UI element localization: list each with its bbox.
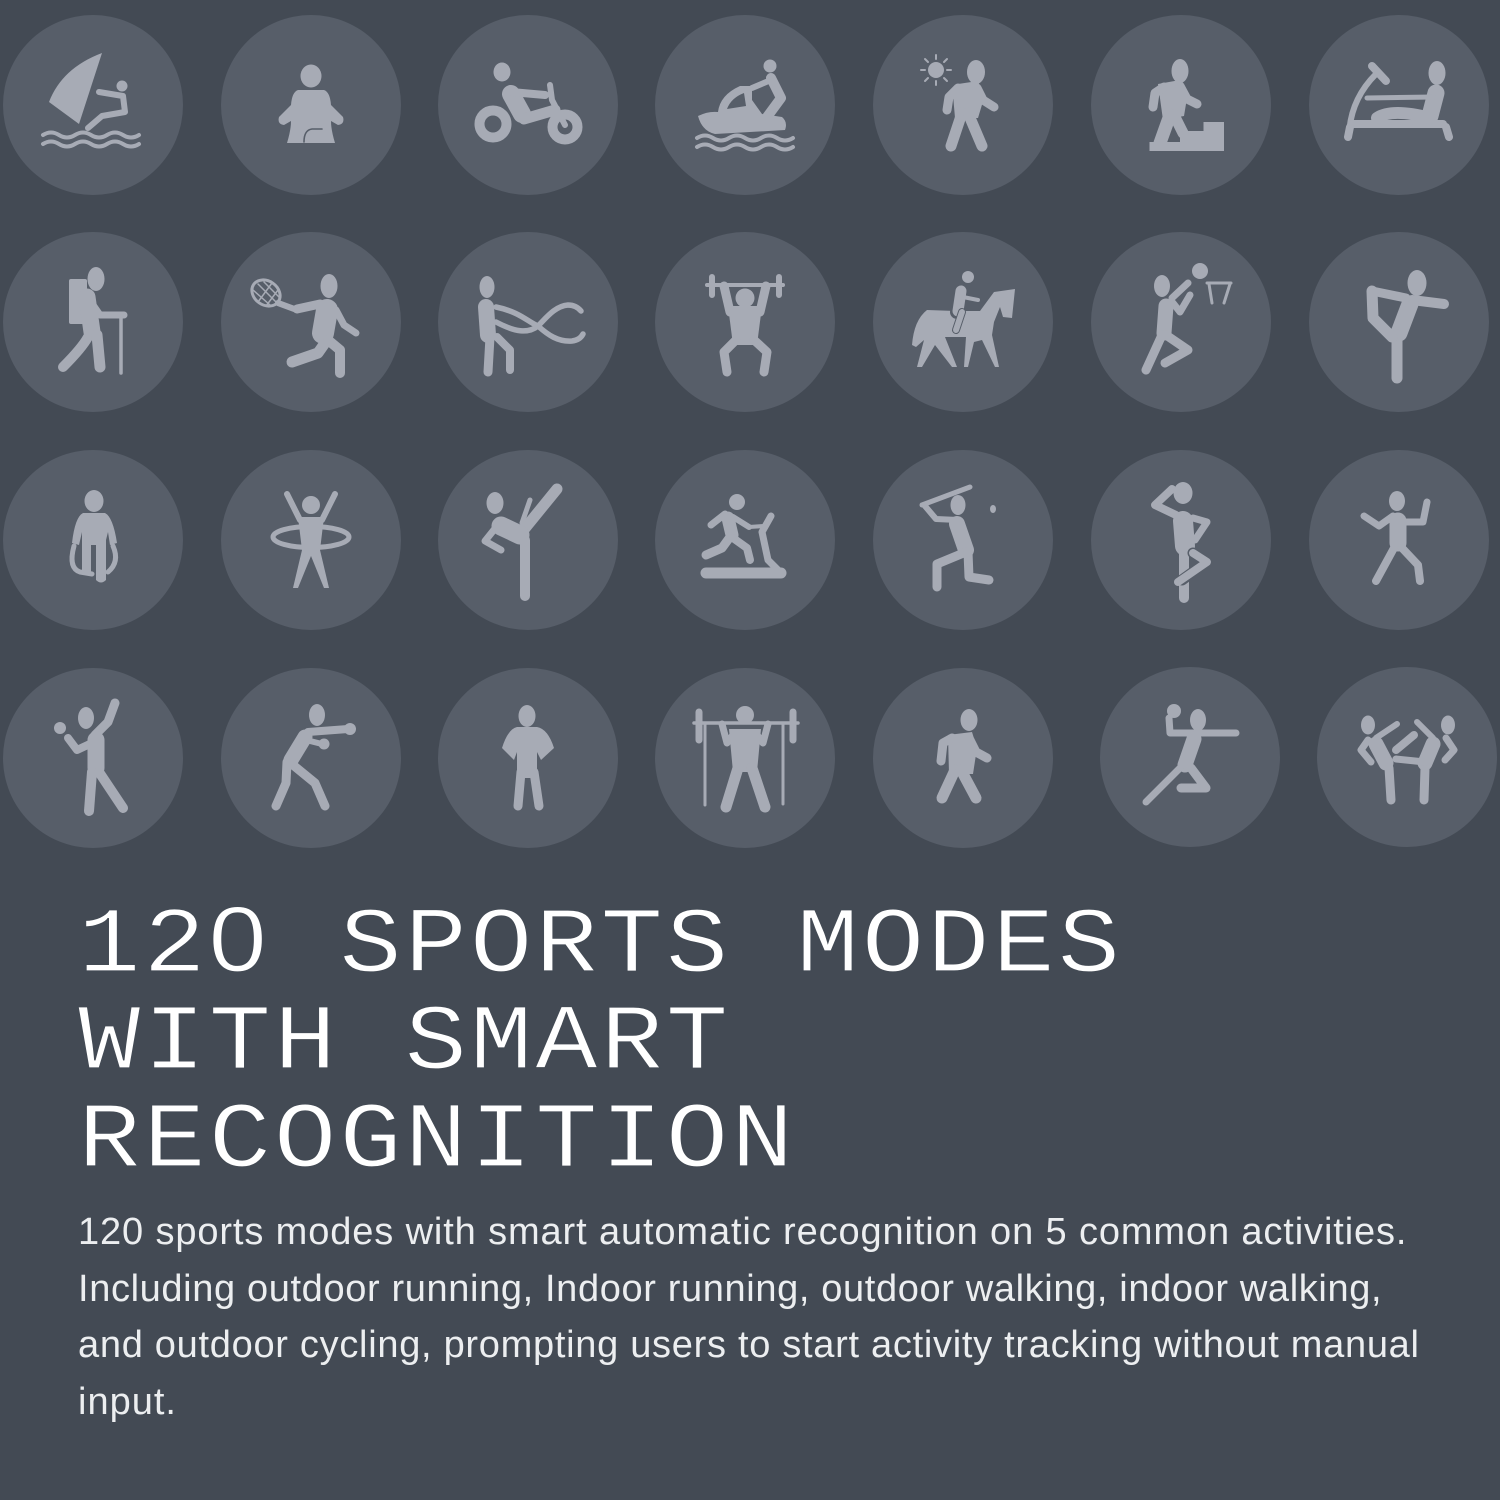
icon: basketball (1091, 232, 1271, 412)
icon: volleyball (1100, 667, 1280, 847)
icon: dance (1309, 450, 1489, 630)
title: RECOGNITION (78, 1088, 796, 1194)
icon: jet ski (655, 15, 835, 195)
title: 120 SPORTS MODES (78, 886, 1123, 998)
icon: squat rack (655, 668, 835, 848)
icon: treadmill (655, 450, 835, 630)
title (78, 886, 1123, 1194)
description text: and outdoor cycling, prompting users to start activity tracking without manual (78, 1324, 1420, 1366)
icon: jump rope (3, 450, 183, 630)
icon: outdoor walking with sun (873, 15, 1053, 195)
icon: weightlifting (655, 232, 835, 412)
description text: Including outdoor running, Indoor running, outdoor walking, indoor walking, (78, 1268, 1382, 1310)
icon: rowing machine (1309, 15, 1489, 195)
icon: standing yoga pose (1091, 450, 1271, 630)
icon: hula hoop (221, 450, 401, 630)
title: WITH SMART (78, 991, 731, 1096)
icon: horse riding (873, 232, 1053, 412)
icon: high kick (438, 450, 618, 630)
icon: meditation (221, 15, 401, 195)
icon: stair stepping (1091, 15, 1271, 195)
icon: racket sport (221, 232, 401, 412)
icon: kickboxing duo (1317, 667, 1497, 847)
icon: motorbike (438, 15, 618, 195)
description text: input. (78, 1380, 177, 1422)
icon: standing stretch (1309, 232, 1489, 412)
icon: boxing (221, 668, 401, 848)
icon: walking (873, 668, 1053, 848)
icon: standing hands on hips (438, 668, 618, 848)
grid of sport mode icons (3, 15, 1497, 848)
icon: hiking (3, 232, 183, 412)
icon: windsurfing (3, 15, 183, 195)
description text (78, 1211, 1420, 1422)
description text: 120 sports modes with smart automatic recognition on 5 common activities. (78, 1211, 1407, 1253)
icon: battle ropes (438, 232, 618, 412)
icon: baseball (873, 450, 1053, 630)
icon: throwing (3, 668, 183, 848)
